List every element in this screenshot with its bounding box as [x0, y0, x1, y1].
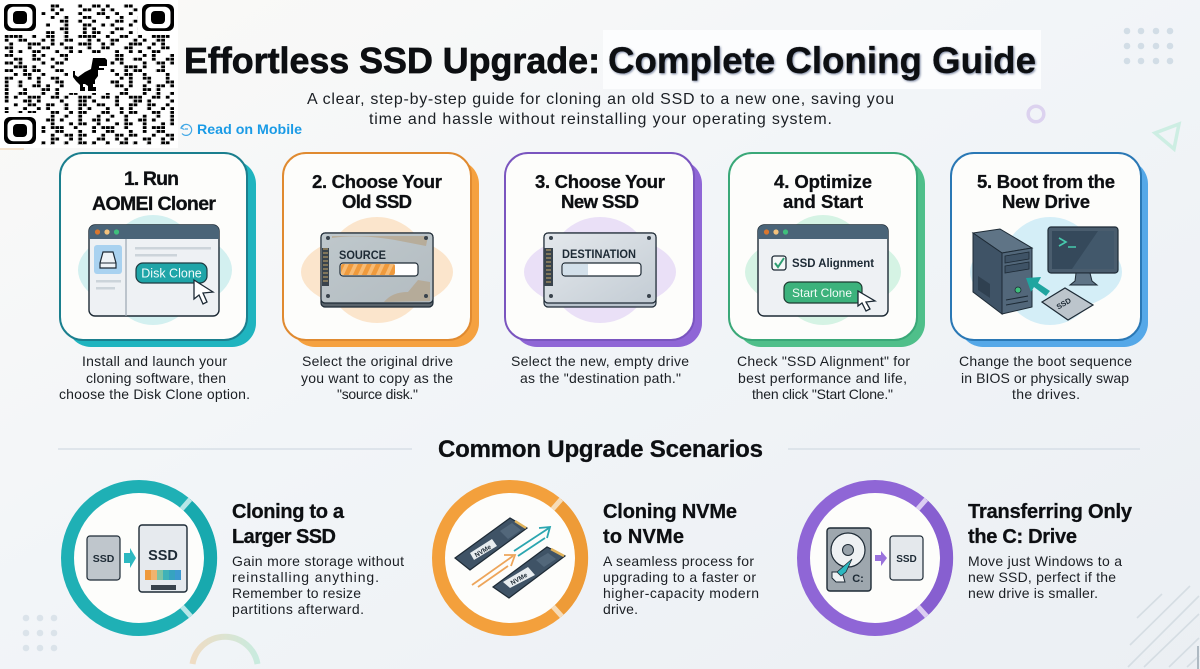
step 5 description: the drives. [1012, 386, 1080, 402]
step 2 description: Select the original drive [302, 353, 453, 369]
step 3 heading: New SSD [561, 191, 639, 212]
step 3 heading: 3. Choose Your [535, 171, 665, 192]
ring icon: HDD C drive to SSD [804, 486, 947, 630]
scenario 1 text: Remember to resize [232, 585, 361, 601]
subtitle: A clear, step-by-step guide for cloning an old SSD to a new one, saving you [307, 91, 894, 108]
step 4 description [737, 353, 910, 402]
step 1 heading [92, 168, 216, 215]
scenario 2 heading: Cloning NVMe [603, 501, 737, 523]
step 1 heading: AOMEI Cloner [92, 193, 216, 215]
ring icon: NVMe to NVMe: NVMe [474, 543, 493, 559]
scenario 3 text: new SSD, perfect if the [968, 569, 1116, 585]
ring icon: larger SSD [68, 486, 211, 630]
scenario 3 heading: Transferring Only [968, 501, 1133, 523]
title: Complete Cloning Guide [608, 40, 1036, 81]
step 2 heading: Old SSD [342, 191, 412, 212]
title [184, 30, 1041, 89]
step 2 description [301, 353, 453, 402]
panel: step 1 [60, 153, 256, 347]
scenario 3 text: Move just Windows to a [968, 553, 1122, 569]
panel: scenario 3 [804, 486, 1133, 630]
icon: disk clone window: Disk Clone [141, 266, 202, 280]
scenario 2 text [603, 553, 759, 617]
scenario 2 text: A seamless process for [603, 553, 754, 569]
scenario 1 heading [232, 501, 345, 548]
read on mobile link: Read on Mobile [197, 122, 303, 137]
step 5 heading [977, 171, 1115, 212]
ring icon: larger SSD: SSD [93, 553, 115, 565]
icon: new destination SSD [524, 217, 676, 323]
step 5 description: in BIOS or physically swap [961, 370, 1129, 386]
title: Effortless SSD Upgrade: [184, 40, 600, 81]
icon: PC tower, monitor and SSD [970, 217, 1122, 325]
step 1 heading: 1. Run [124, 168, 179, 190]
panel: step 3 [505, 153, 702, 347]
panel: step 5 [951, 153, 1148, 347]
scenario 2 heading [603, 501, 737, 548]
scenario 2 text: upgrading to a faster or [603, 569, 756, 585]
step 5 description: Change the boot sequence [959, 353, 1132, 369]
step 4 description: best performance and life, [738, 370, 907, 386]
scenario 2 text: higher-capacity modern [603, 585, 759, 601]
step 4 heading: 4. Optimize [774, 171, 872, 192]
step 4 heading [774, 171, 872, 212]
icon: PC tower, monitor and SSD: SSD [1055, 296, 1073, 311]
scenario 1 text [232, 553, 404, 617]
step 1 description: cloning software, then [86, 370, 226, 386]
scenario 3 heading: the C: Drive [968, 526, 1077, 548]
scenario 2 text: drive. [603, 601, 638, 617]
scenario 3 heading [968, 501, 1133, 548]
icon: alignment window: SSD Alignment [792, 256, 874, 270]
step 1 description: Install and launch your [82, 353, 227, 369]
scenario 2 heading: to NVMe [603, 526, 684, 548]
scenario 3 text: new drive is smaller. [968, 585, 1098, 601]
step 3 description: Select the new, empty drive [511, 353, 689, 369]
subtitle [307, 91, 894, 128]
ring icon: HDD C drive to SSD: C: [852, 573, 864, 585]
step 4 description: Check "SSD Alignment" for [737, 353, 910, 369]
scenario 3 text [968, 553, 1122, 601]
scenario 1 text: partitions afterward. [232, 601, 364, 617]
scenario 1 heading: Cloning to a [232, 501, 345, 523]
step 1 description: choose the Disk Clone option. [59, 386, 250, 402]
step 5 heading: 5. Boot from the [977, 171, 1115, 192]
ring icon: NVMe to NVMe: NVMe [510, 572, 529, 587]
step 5 description [959, 353, 1132, 402]
ring icon: larger SSD: SSD [148, 548, 178, 564]
step 1 description [59, 353, 250, 402]
step 4 description: then click "Start Clone." [752, 386, 893, 402]
ring icon: NVMe to NVMe [438, 486, 582, 630]
panel: step 4 [729, 153, 925, 347]
panel: scenario 1 [68, 486, 404, 630]
icon: old source SSD [301, 217, 453, 323]
section heading: common upgrade scenarios: Common Upgrade Scenarios [438, 436, 763, 463]
icon: old source SSD: SOURCE [339, 248, 386, 262]
step 2 description: "source disk." [337, 386, 418, 402]
scenario 1 text: reinstalling anything. [232, 569, 379, 585]
icon: alignment window: Start Clone [792, 286, 852, 300]
step 2 heading: 2. Choose Your [312, 171, 442, 192]
step 5 heading: New Drive [1002, 191, 1090, 212]
scenario 1 text: Gain more storage without [232, 553, 404, 569]
step 4 heading: and Start [783, 191, 863, 212]
icon: disk clone window [78, 215, 232, 325]
scenario 1 heading: Larger SSD [232, 526, 336, 548]
ring icon: HDD C drive to SSD: SSD [896, 554, 917, 565]
icon: new destination SSD: DESTINATION [562, 247, 636, 261]
step 3 description [511, 353, 689, 386]
QR code [0, 0, 178, 148]
step 2 heading [312, 171, 442, 212]
panel: step 2 [283, 153, 479, 347]
step 3 description: as the "destination path." [520, 370, 681, 386]
step 3 heading [535, 171, 665, 212]
icon: alignment window [745, 215, 901, 325]
panel: scenario 2 [438, 486, 759, 630]
step 2 description: you want to copy as the [301, 370, 453, 386]
subtitle: time and hassle without reinstalling your operating system. [369, 111, 832, 128]
